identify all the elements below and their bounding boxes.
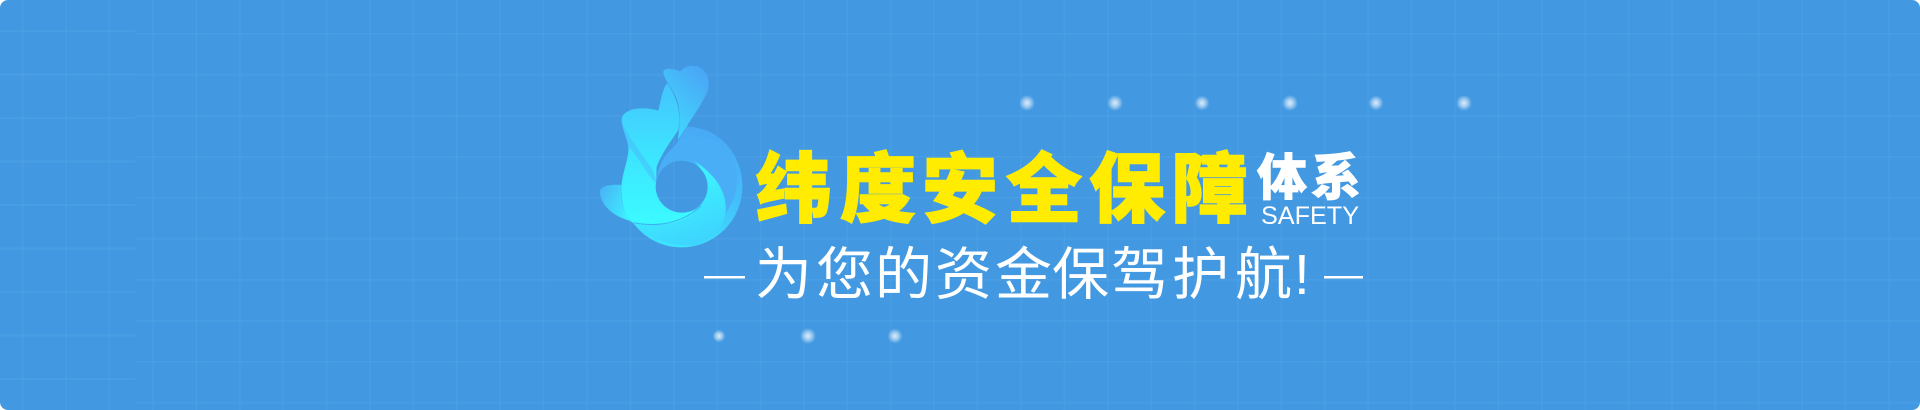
dash right	[1324, 276, 1363, 278]
subtitle: 为您的资金保驾护航！: 为	[755, 243, 812, 307]
heading: 体系: 体	[1257, 150, 1307, 206]
heading: 体系: 系	[1311, 150, 1361, 206]
logo: inner swoosh	[633, 162, 726, 245]
logo: lower left lobe	[600, 185, 633, 222]
subtitle: 为您的资金保驾护航！: !	[1294, 243, 1310, 307]
subtitle: 为您的资金保驾护航！: 金	[995, 243, 1052, 307]
logo: central body	[622, 83, 701, 224]
title: 纬度安全保障	[756, 148, 1248, 233]
dash left	[704, 276, 745, 278]
glowing dots top row	[1019, 95, 1472, 111]
subtitle: 为您的资金保驾护航！: 保	[1052, 243, 1109, 307]
logo: left strand highlight	[622, 120, 656, 183]
subtitle: 为您的资金保驾护航！: 驾	[1111, 243, 1168, 307]
title: 纬度安全保障: 障	[1172, 148, 1248, 233]
title: 纬度安全保障: 全	[1006, 148, 1082, 233]
subtitle: 为您的资金保驾护航！: 您	[816, 243, 873, 307]
subtitle: 为您的资金保驾护航！: 资	[935, 243, 992, 307]
logo: lower edge accent	[633, 206, 701, 224]
logo: blue arc over ring	[656, 146, 737, 213]
subtitle: 为您的资金保驾护航！: 的	[875, 243, 932, 307]
title: 纬度安全保障: 保	[1089, 148, 1165, 233]
title: 纬度安全保障: 安	[922, 148, 998, 233]
subtitle: 为您的资金保驾护航！	[755, 243, 1310, 307]
subtitle: 为您的资金保驾护航！: 护	[1172, 243, 1229, 307]
logo: upper heart flame	[663, 66, 709, 140]
logo: outer ring	[633, 127, 742, 247]
title: 纬度安全保障: 度	[840, 148, 916, 233]
glowing dots bottom row	[712, 328, 902, 344]
label: SAFETY: SAFETY	[1261, 202, 1359, 230]
subtitle: 为您的资金保驾护航！: 航	[1235, 243, 1292, 307]
heading: 体系	[1257, 150, 1361, 206]
title: 纬度安全保障: 纬	[756, 148, 832, 233]
logo	[600, 66, 742, 247]
